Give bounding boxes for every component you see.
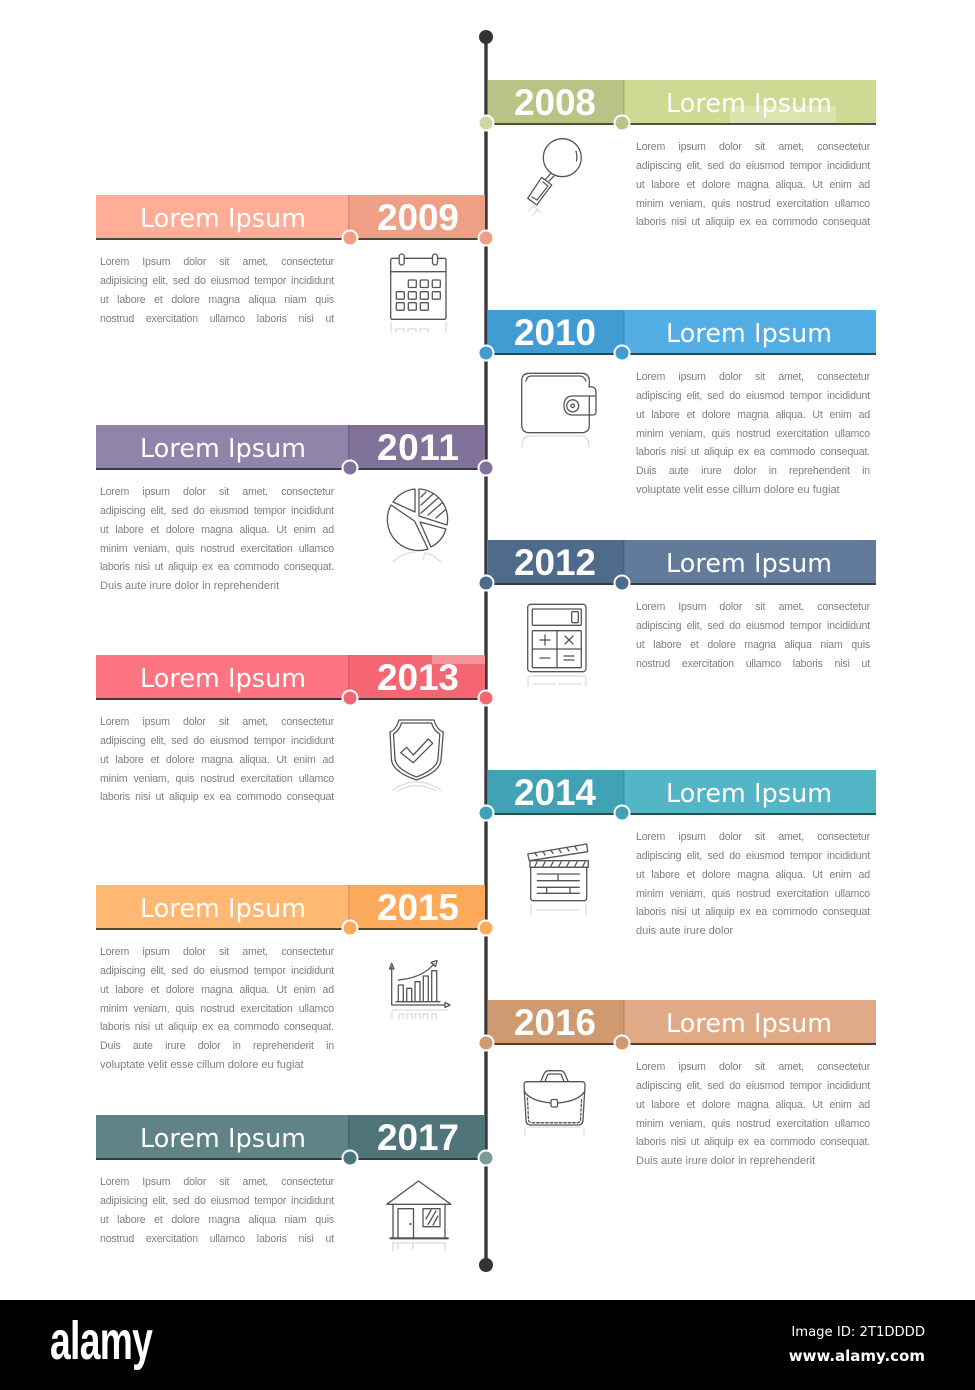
text: 2014 description: minim veniam, quis nostrud exercitation ullamco: [636, 888, 870, 900]
header: 2009: [96, 195, 492, 246]
text: 2012 description: [636, 601, 870, 670]
header: 2008: Lorem Ipsum: [666, 88, 832, 118]
text: 2016 description: laboris nisi ut aliquip ex ea commodo consequat.: [636, 1136, 870, 1148]
text: 2013 description: Lorem ipsum dolor sit amet, consectetur: [100, 716, 334, 728]
header: 2013: 2013: [377, 657, 459, 698]
header: 2014: Lorem Ipsum: [666, 778, 832, 808]
text: 2012 description: ut labore et dolore magna aliqua niam quis: [636, 639, 870, 651]
text: 2017 description: ut labore et dolore magna aliqua niam quis: [100, 1214, 334, 1226]
text: 2012 description: nostrud exercitation ullamco laboris nisi ut: [636, 658, 870, 670]
icon: briefcase: [523, 1070, 586, 1136]
text: 2015 description: laboris nisi ut aliquip ex ea commodo consequat.: [100, 1021, 334, 1033]
text: 2011 description: Duis aute irure dolor in reprehenderit: [100, 580, 279, 592]
icon: pie chart: [386, 488, 448, 562]
header: 2012: [480, 540, 876, 592]
text: 2016 description: Lorem ipsum dolor sit amet, consectetur: [636, 1061, 870, 1073]
text: 2010 description: adipiscing elit, sed do eiusmod tempor incididunt: [636, 390, 870, 402]
header: 2012: Lorem Ipsum: [666, 548, 832, 578]
header: 2016: 2016: [514, 1002, 596, 1043]
text: 2008 description: laboris nisi ut aliquip ex ea commodo consequat: [636, 216, 870, 228]
text: 2014 description: adipiscing elit, sed do eiusmod tempor incididunt: [636, 850, 870, 862]
header: 2010: 2010: [514, 312, 596, 353]
text: 2014 description: ut labore et dolore magna aliqua. Ut enim ad: [636, 869, 870, 881]
text: 2008 description: ut labore et dolore magna aliqua. Ut enim ad: [636, 179, 870, 191]
icon: wallet: [521, 372, 597, 448]
text: 2015 description: [100, 946, 334, 1071]
text: 2015 description: minim veniam, quis nostrud exercitation ullamco: [100, 1003, 334, 1015]
text: 2016 description: ut labore et dolore magna aliqua. Ut enim ad: [636, 1099, 870, 1111]
header: 2009: 2009: [377, 197, 459, 238]
text: 2008 description: [636, 141, 870, 228]
text: 2015 description: Duis aute irure dolor in reprehenderit in: [100, 1040, 334, 1052]
text: 2009 description: [100, 256, 334, 325]
footer url: www.alamy.com: [789, 1347, 925, 1365]
text: 2008 description: Lorem ipsum dolor sit amet, consectetur: [636, 141, 870, 153]
header: 2010: [480, 310, 876, 362]
icon: house: [386, 1180, 452, 1252]
text: 2011 description: minim veniam, quis nostrud exercitation ullamco: [100, 543, 334, 555]
text: 2016 description: Duis aute irure dolor in reprehenderit: [636, 1155, 815, 1167]
text: 2014 description: Lorem ipsum dolor sit amet, consectetur: [636, 831, 870, 843]
text: 2016 description: adipiscing elit, sed do eiusmod tempor incididunt: [636, 1080, 870, 1092]
text: 2016 description: [636, 1061, 870, 1167]
text: 2015 description: Lorem ipsum dolor sit amet, consectetur: [100, 946, 334, 958]
text: 2010 description: minim veniam, quis nostrud exercitation ullamco: [636, 428, 870, 440]
text: 2010 description: Lorem ipsum dolor sit amet, consectetur: [636, 371, 870, 383]
text: 2015 description: ut labore et dolore magna aliqua. Ut enim ad: [100, 984, 334, 996]
text: 2010 description: ut labore et dolore magna aliqua. Ut enim ad: [636, 409, 870, 421]
header: 2015: [96, 885, 492, 936]
header: 2017: [96, 1115, 492, 1166]
header: 2010: Lorem Ipsum: [666, 318, 832, 348]
text: 2010 description: voluptate velit esse cillum dolore eu fugiat: [636, 484, 840, 496]
text: 2008 description: adipiscing elit, sed do eiusmod tempor incididunt: [636, 160, 870, 172]
text: 2011 description: Lorem ipsum dolor sit amet, consectetur: [100, 486, 334, 498]
header: 2011: 2011: [377, 427, 459, 468]
text: 2013 description: ut labore et dolore magna aliqua. Ut enim ad: [100, 754, 334, 766]
header: 2017: Lorem Ipsum: [140, 1123, 306, 1153]
text: 2012 description: Lorem Ipsum dolor sit amet, consectetur: [636, 601, 870, 613]
text: 2014 description: [636, 831, 870, 937]
text: 2013 description: [100, 716, 334, 803]
icon: calendar: [390, 253, 447, 332]
text: 2014 description: duis aute irure dolor: [636, 925, 733, 937]
icon: magnifying glass: [527, 138, 582, 216]
header: 2008: 2008: [514, 82, 596, 123]
text: 2009 description: ut labore et dolore magna aliqua niam quis: [100, 294, 334, 306]
text: 2011 description: [100, 486, 334, 592]
icon: calculator: [527, 604, 587, 686]
footer image id: Image ID: 2T1DDDD: [791, 1325, 925, 1340]
icon: clapperboard: [527, 843, 589, 916]
header: 2015: Lorem Ipsum: [140, 893, 306, 923]
text: 2008 description: minim veniam, quis nostrud exercitation ullamco: [636, 198, 870, 210]
text: 2011 description: ut labore et dolore magna aliqua. Ut enim ad: [100, 524, 334, 536]
header: 2011: [96, 425, 492, 476]
text: 2013 description: laboris nisi ut aliquip ex ea commodo consequat: [100, 791, 334, 803]
text: 2009 description: Lorem Ipsum dolor sit amet, consectetur: [100, 256, 334, 268]
timeline spine: [479, 30, 493, 1272]
text: 2010 description: Duis aute irure dolor in reprehenderit in: [636, 465, 870, 477]
text: 2014 description: laboris nisi ut aliquip ex ea commodo consequat: [636, 906, 870, 918]
text: 2017 description: [100, 1176, 334, 1245]
header: 2011: Lorem Ipsum: [140, 433, 306, 463]
header: 2012: 2012: [514, 542, 596, 583]
text: 2011 description: adipiscing elit, sed do eiusmod tempor incididunt: [100, 505, 334, 517]
text: 2015 description: voluptate velit esse cillum dolore eu fugiat: [100, 1059, 304, 1071]
header: 2016: [480, 1000, 876, 1052]
header: 2015: 2015: [377, 887, 459, 928]
text: 2017 description: Lorem Ipsum dolor sit amet, consectetur: [100, 1176, 334, 1188]
header: 2014: [480, 770, 876, 822]
header: 2016: Lorem Ipsum: [666, 1008, 832, 1038]
text: 2010 description: laboris nisi ut aliquip ex ea commodo consequat.: [636, 446, 870, 458]
text: 2013 description: adipiscing elit, sed do eiusmod tempor incididunt: [100, 735, 334, 747]
text: 2017 description: nostrud exercitation ullamco laboris nisi ut: [100, 1233, 334, 1245]
header: 2017: 2017: [377, 1117, 459, 1158]
text: 2013 description: minim veniam, quis nostrud exercitation ullamco: [100, 773, 334, 785]
text: 2017 description: adipisicing elit, sed do eiusmod tempor incididunt: [100, 1195, 334, 1207]
text: 2011 description: laboris nisi ut aliquip ex ea commodo consequat.: [100, 561, 334, 573]
icon: growth chart: [388, 960, 451, 1020]
text: 2015 description: adipiscing elit, sed do eiusmod tempor incididunt: [100, 965, 334, 977]
footer logo: alamy: [50, 1311, 152, 1371]
text: 2012 description: adipiscing elit, sed do eiusmod tempor incididunt: [636, 620, 870, 632]
header: 2009: Lorem Ipsum: [140, 203, 306, 233]
header: 2014: 2014: [514, 772, 596, 813]
text: 2016 description: minim veniam, quis nostrud exercitation ullamco: [636, 1118, 870, 1130]
footer band: [0, 1300, 975, 1390]
icon: shield with check: [389, 719, 444, 792]
text: 2010 description: [636, 371, 870, 496]
header: 2013: [96, 655, 492, 706]
header: 2013: Lorem Ipsum: [140, 663, 306, 693]
text: 2009 description: adipisicing elit, sed do eiusmod tempor incididunt: [100, 275, 334, 287]
text: 2009 description: nostrud exercitation ullamco laboris nisi ut: [100, 313, 334, 325]
header: 2008: [480, 80, 876, 132]
